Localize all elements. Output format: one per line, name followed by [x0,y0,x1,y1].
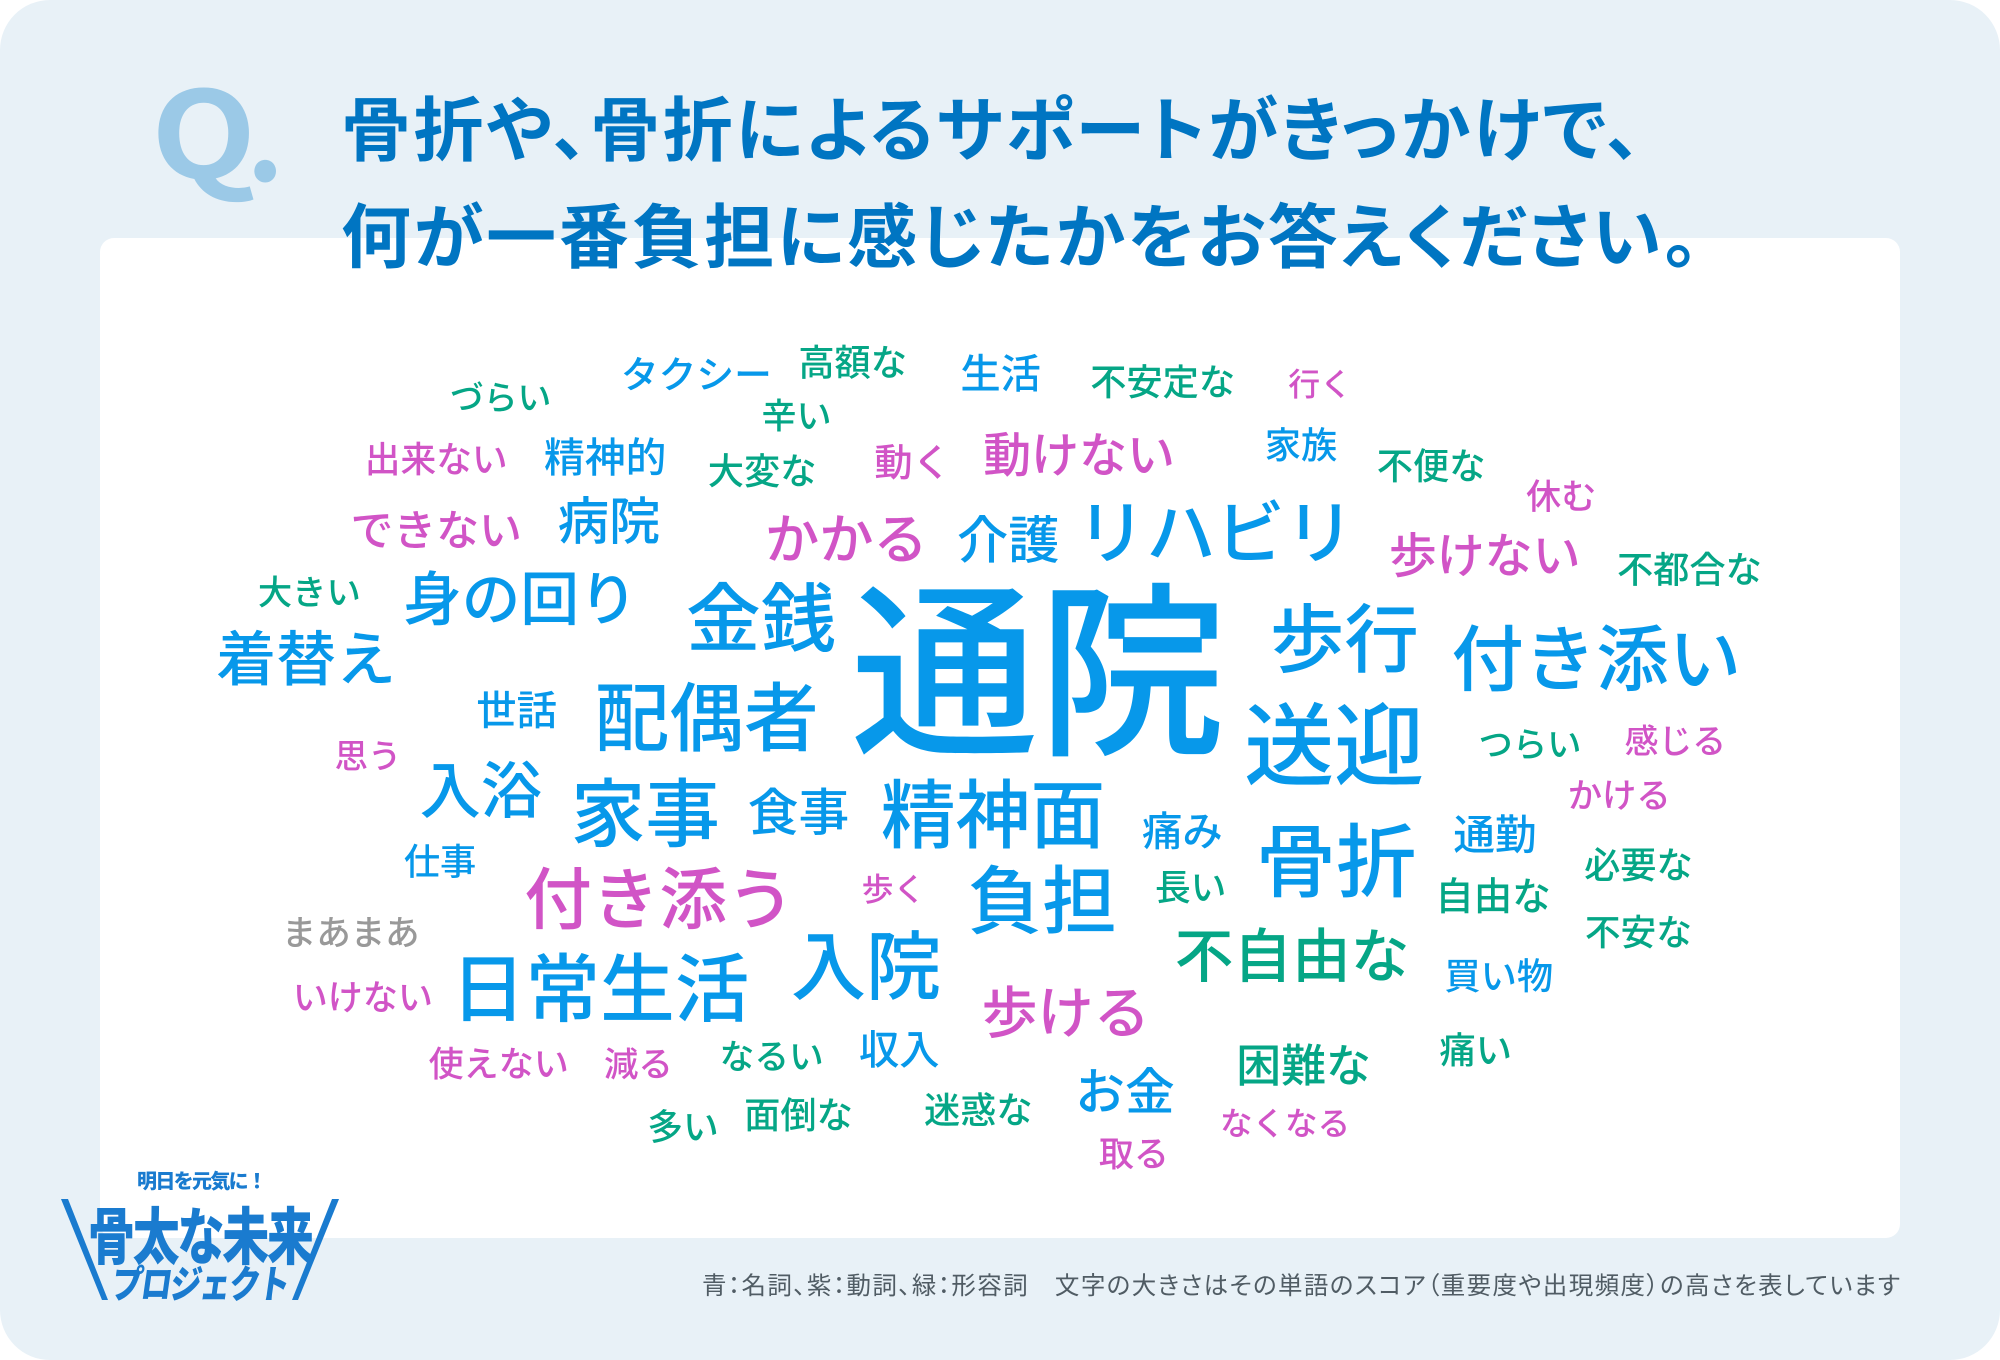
word: 思う: 思う [335,729,401,778]
word: 歩行: 歩行 [1270,581,1419,688]
word: 負担: 負担 [968,842,1117,949]
word: 身の回り: 身の回り [403,552,638,637]
word: できない: できない [351,496,522,558]
word: 送迎: 送迎 [1244,674,1424,804]
title [341,75,1699,283]
word: 休む: 休む [1526,469,1596,520]
word: 不便な: 不便な [1377,438,1485,490]
white word cloud panel [100,238,1900,1238]
word: 買い物: 買い物 [1444,948,1553,1000]
word: 取る: 取る [1099,1126,1169,1177]
title line 1: 骨折や、骨折によるサポートがきっかけで、 [341,75,1641,176]
word: 痛み: 痛み [1142,799,1223,858]
word: いけない: いけない [293,970,433,1021]
word: 骨折: 骨折 [1256,798,1416,914]
word: 家事: 家事 [571,756,720,863]
word: 不都合な: 不都合な [1617,541,1762,593]
word: 介護: 介護 [957,500,1060,574]
word: 通院: 通院 [851,523,1226,794]
word: 仕事: 仕事 [404,833,476,885]
logo main text: 骨太な未来 [88,1187,314,1277]
word: 迷惑な: 迷惑な [924,1082,1033,1134]
word: タクシー: タクシー [621,344,772,399]
word: 世話: 世話 [476,677,557,736]
word: 着替え: 着替え [216,611,396,698]
word: リハビリ: リハビリ [1077,477,1355,578]
logo: 骨太な未来プロジェクト [61,1165,339,1310]
word: 動く: 動く [874,433,951,488]
Q mark: Q [151,40,256,213]
word: 自由な: 自由な [1435,866,1551,922]
word: 使えない: 使えない [429,1037,569,1088]
word: 病院: 病院 [558,481,660,555]
word: 感じる: 感じる [1625,714,1726,763]
logo tagline: 明日を元気に！ [137,1165,267,1194]
logo right slash [292,1199,339,1300]
word: 必要な: 必要な [1584,837,1693,889]
word: かかる: かかる [765,496,928,575]
word: 日常生活: 日常生活 [451,929,749,1037]
word: 食事: 食事 [748,771,849,845]
word: 長い: 長い [1155,860,1226,911]
word: 動けない: 動けない [983,416,1175,486]
word: なるい: なるい [720,1029,824,1079]
word: 多い: 多い [647,1100,719,1151]
word: つらい: つらい [1479,716,1581,766]
word: づらい: づらい [450,370,551,419]
word: 歩く: 歩く [862,865,925,911]
Q mark: . [246,44,284,215]
title line 2: 何が一番負担に感じたかをお答えください。 [341,182,1699,283]
word: 家族: 家族 [1265,417,1337,469]
word: 収入: 収入 [859,1017,940,1076]
word: 精神面: 精神面 [881,755,1105,864]
word: 行く: 行く [1288,359,1352,405]
word: 困難な: 困難な [1236,1030,1371,1095]
word: 不安な: 不安な [1585,905,1692,956]
word: 入浴: 入浴 [420,741,542,830]
word: 入院: 入院 [791,907,941,1016]
word: なくなる: なくなる [1220,1098,1350,1145]
word: 大きい: 大きい [258,565,361,615]
word: 付き添う: 付き添う [524,846,795,943]
word: まあまあ: まあまあ [282,905,420,955]
word: 配偶者: 配偶者 [595,658,819,767]
word: 減る: 減る [604,1037,673,1087]
word: 生活: 生活 [960,341,1041,400]
word: 大変な: 大変な [708,443,816,495]
legend note: 青：名詞、紫：動詞、緑：形容詞 文字の大きさはその単語のスコア（重要度や出現頻度）の高さを表しています [702,1267,1900,1302]
word cloud [216,335,1762,1177]
word: 歩ける: 歩ける [982,969,1150,1050]
word: 面倒な: 面倒な [744,1087,853,1139]
word: 精神的: 精神的 [544,425,666,484]
word: 高額な: 高額な [798,335,907,387]
logo sub text: プロジェクト [108,1254,294,1310]
word: 金銭: 金銭 [686,558,836,667]
word: 出来ない: 出来ない [365,432,508,483]
word: 辛い: 辛い [761,389,832,440]
logo left slash [61,1199,108,1300]
word: 不自由な: 不自由な [1175,909,1409,994]
word: お金: お金 [1075,1053,1175,1125]
word: 痛い: 痛い [1440,1022,1512,1074]
word: 通勤: 通勤 [1453,801,1536,861]
word: 付き添い: 付き添い [1451,601,1741,706]
word: かける: かける [1568,767,1671,817]
word: 歩けない: 歩けない [1389,517,1581,587]
word: 不安定な: 不安定な [1090,354,1235,406]
